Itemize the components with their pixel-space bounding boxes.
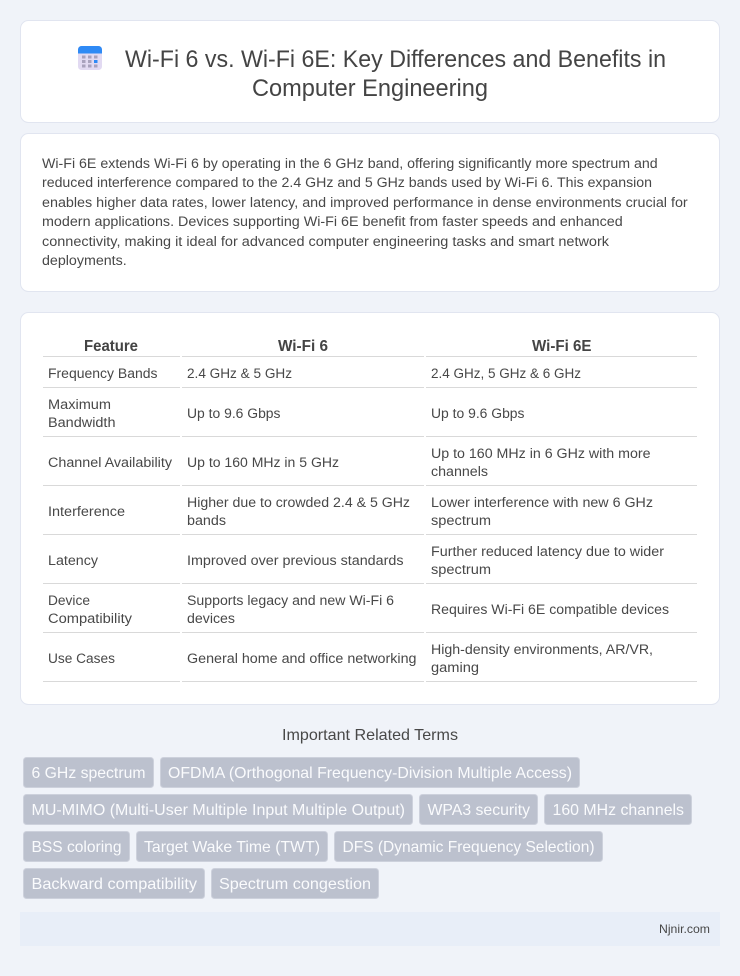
text block: intro: connectivity, making it ideal for advanced computer engineering tasks and smart network	[42, 234, 610, 250]
row: use cases	[48, 642, 653, 676]
tag: Spectrum congestion: Spectrum congestion	[219, 876, 371, 893]
tag: MU-MIMO	[24, 794, 412, 824]
row: latency: Improved over previous standards	[187, 553, 404, 569]
row: device compatibility: Device	[48, 593, 90, 609]
text block: intro: deployments.	[42, 253, 127, 269]
title	[125, 46, 666, 102]
row: latency: spectrum	[431, 562, 491, 578]
tag: WPA3 security	[420, 794, 538, 824]
tag: MU-MIMO: MU-MIMO (Multi-User Multiple Input Multiple Output)	[32, 802, 405, 819]
row: device compatibility: Requires Wi-Fi 6E compatible devices	[431, 602, 669, 618]
text block: intro: reduced interference compared to the 2.4 GHz and 5 GHz bands used by Wi-Fi 6. This expansion	[42, 175, 652, 191]
row: maximum bandwidth: Bandwidth	[48, 415, 116, 431]
row: latency: Further reduced latency due to wider	[431, 544, 664, 560]
row: use cases: General home and office networking	[187, 651, 416, 667]
related term tags	[24, 758, 692, 898]
tag: 6 GHz spectrum	[24, 758, 154, 788]
table header	[84, 338, 592, 355]
row: interference: bands	[187, 513, 226, 529]
tag: 6 GHz spectrum: 6 GHz spectrum	[32, 765, 146, 782]
row: maximum bandwidth	[48, 397, 524, 431]
row: channel availability: Channel Availability	[48, 455, 173, 471]
row: device compatibility: Compatibility	[48, 611, 133, 627]
panel: intro paragraph	[20, 134, 720, 292]
tag: Target Wake Time	[136, 832, 328, 862]
row: frequency bands: 2.4 GHz & 5 GHz	[187, 366, 292, 382]
row: interference: Lower interference with new 6 GHz	[431, 495, 653, 511]
text block: intro: enables higher data rates, lower latency, and improved performance in dense environments crucial for	[42, 195, 688, 211]
row: interference: Interference	[48, 504, 125, 520]
tag: 160 MHz channels: 160 MHz channels	[552, 802, 684, 819]
tag: Backward compatibility	[24, 868, 204, 898]
tag: DFS: DFS (Dynamic Frequency Selection)	[342, 839, 594, 856]
row: use cases: Use Cases	[48, 651, 115, 667]
text block: intro: modern applications. Devices supporting Wi-Fi 6E benefit from faster speeds and enhanced	[42, 214, 623, 230]
row: device compatibility: Supports legacy and new Wi-Fi 6	[187, 593, 394, 609]
row: frequency bands	[48, 366, 581, 382]
text block: intro	[42, 156, 688, 269]
row: use cases: High-density environments, AR/VR,	[431, 642, 653, 658]
row: channel availability: channels	[431, 464, 488, 480]
footer: Njnir.com	[659, 922, 710, 936]
row: use cases: gaming	[431, 660, 479, 676]
tag: OFDMA	[160, 758, 580, 788]
row: maximum bandwidth: Up to 9.6 Gbps	[431, 406, 524, 422]
row: frequency bands: 2.4 GHz, 5 GHz & 6 GHz	[431, 366, 581, 382]
title: Wi-Fi 6 vs. Wi-Fi 6E: Key Differences and Benefits in	[125, 46, 666, 73]
footer	[20, 912, 720, 946]
heading: important related terms: Important Related Terms	[282, 727, 458, 744]
row: channel availability	[48, 446, 651, 480]
tag: Target Wake Time: Target Wake Time (TWT)	[144, 839, 320, 856]
row: latency	[48, 544, 664, 578]
icon: calendar	[78, 46, 102, 70]
row: device compatibility	[48, 593, 669, 627]
row: interference: spectrum	[431, 513, 491, 529]
title: Computer Engineering	[252, 75, 488, 102]
row: frequency bands: Frequency Bands	[48, 366, 158, 382]
row: interference: Higher due to crowded 2.4 & 5 GHz	[187, 495, 410, 511]
tag: BSS coloring: BSS coloring	[32, 839, 122, 856]
row: maximum bandwidth: Maximum	[48, 397, 111, 413]
tag: DFS	[334, 832, 602, 862]
text block: intro: Wi-Fi 6E extends Wi-Fi 6 by operating in the 6 GHz band, offering significantly more spectrum and	[42, 156, 658, 172]
row: interference	[48, 495, 653, 529]
row: maximum bandwidth: Up to 9.6 Gbps	[187, 406, 280, 422]
table header: Wi-Fi 6E	[532, 338, 592, 355]
tag: BSS coloring	[24, 832, 130, 862]
row: channel availability: Up to 160 MHz in 6 GHz with more	[431, 446, 651, 462]
tag: 160 MHz channels	[544, 794, 692, 824]
tag: Backward compatibility: Backward compatibility	[32, 876, 197, 893]
tag: WPA3 security: WPA3 security	[428, 802, 530, 819]
row: latency: Latency	[48, 553, 99, 569]
table header: Wi-Fi 6	[278, 338, 328, 355]
panel: comparison table	[20, 312, 720, 704]
panel: header	[20, 20, 720, 122]
row: device compatibility: devices	[187, 611, 235, 627]
tag: Spectrum congestion	[212, 868, 378, 898]
table header: Feature	[84, 338, 138, 355]
tag: OFDMA: OFDMA (Orthogonal Frequency-Division Multiple Access)	[168, 765, 572, 782]
row: channel availability: Up to 160 MHz in 5 GHz	[187, 455, 339, 471]
